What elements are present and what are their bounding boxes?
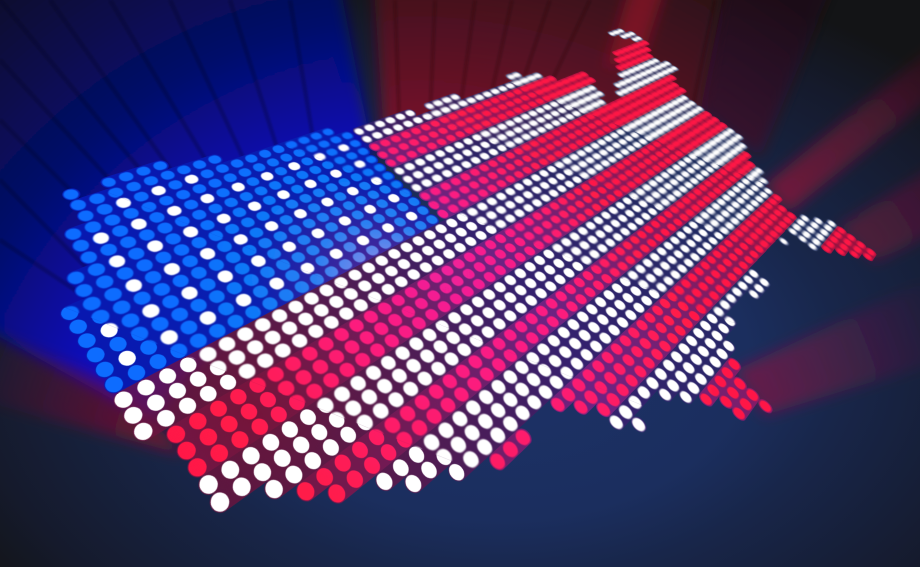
red rays along the top [372, 0, 730, 150]
streaks in top rays [395, 0, 715, 140]
dots zone: near [62, 189, 646, 470]
dots zone: middle [101, 145, 772, 420]
blue rays top left [0, 0, 372, 420]
maroon rays lower left [0, 315, 185, 455]
dark streaks in blue rays [0, 0, 320, 326]
red rays from the southern tip [734, 265, 920, 415]
dots zone: mid-far [284, 110, 770, 324]
glow under blue canton [9, 113, 433, 384]
red rays from the eastern island [838, 150, 920, 262]
dot map of the USA as a flag [60, 28, 877, 514]
red rays toward upper right [765, 25, 920, 213]
dots zone: far [422, 82, 876, 262]
perspective plane holding the dot map [219, 501, 221, 503]
dots zone: nearest corner [60, 308, 465, 512]
bright red rays above the northeast [605, 0, 668, 70]
dots zone: farthest [505, 28, 770, 184]
dim rays right of the northeast [700, 0, 840, 157]
